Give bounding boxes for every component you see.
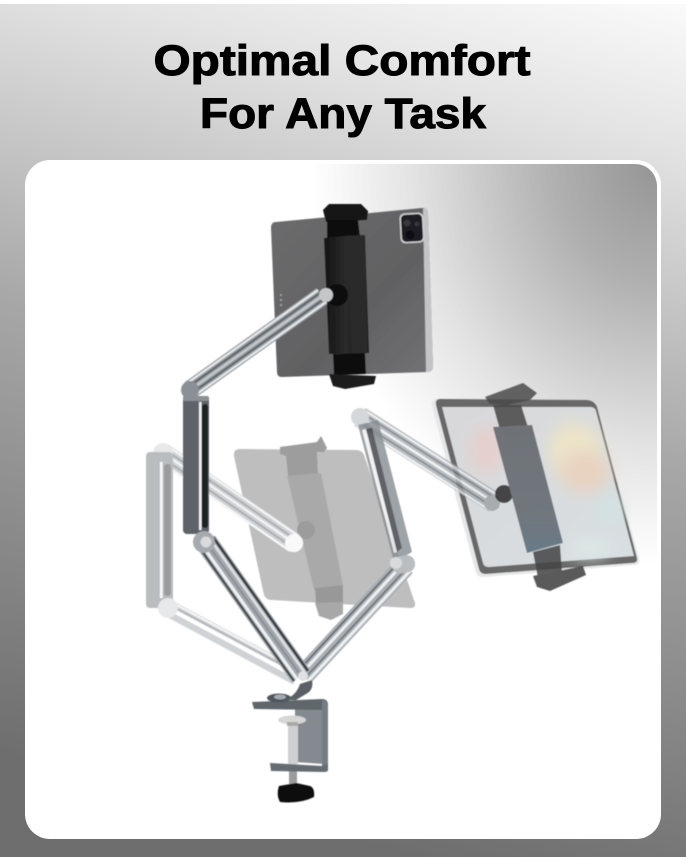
ghost lower arm: [158, 598, 300, 677]
clamp back wall: [322, 700, 328, 772]
title: [154, 37, 530, 138]
title: Optimal Comfort: [154, 37, 530, 85]
clamp inner back: [295, 706, 324, 764]
ball joint: [319, 284, 348, 306]
clamp screw: [278, 716, 306, 788]
clamp black knob: [278, 783, 314, 802]
right tilted link: [358, 420, 412, 562]
panel: product photo card: [25, 160, 661, 839]
front vertical link: [183, 396, 209, 534]
right lower arm: [298, 554, 417, 681]
ghost position: left arm and tablet: [146, 436, 415, 677]
ghost position: right arm and tablet: [298, 383, 639, 681]
front tablet clamp: [323, 204, 376, 389]
clamp swivel base: [267, 671, 312, 702]
right tablet clamp: [485, 383, 586, 591]
icon: tablet camera: [399, 212, 425, 244]
clamp bottom plate: [270, 763, 328, 772]
right upper arm: [351, 408, 500, 511]
front lower arm: [193, 531, 308, 681]
ghost upper arm: [153, 443, 303, 552]
clamp top plate: [252, 699, 328, 712]
ghost tablet: [234, 436, 415, 620]
front upper arm: [181, 290, 326, 399]
title: For Any Task: [200, 90, 486, 138]
front tablet: [271, 208, 433, 377]
right tablet: [432, 399, 639, 577]
desk clamp base: [252, 671, 328, 802]
ghost vertical link: [146, 452, 173, 608]
